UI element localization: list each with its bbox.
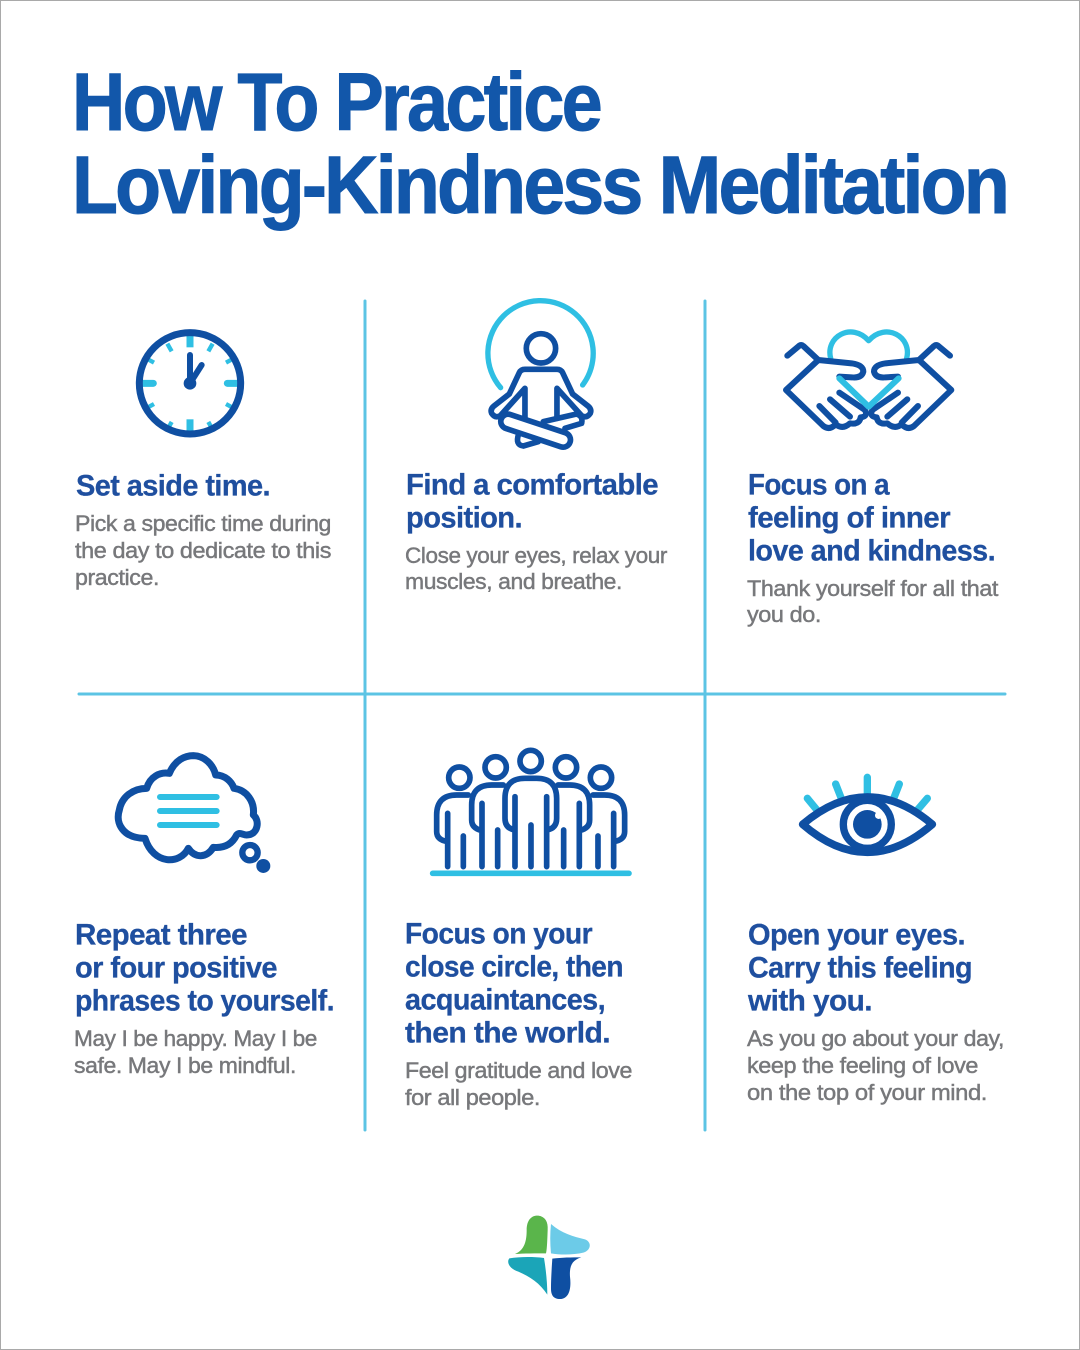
heading: open your eyes — [747, 918, 972, 1018]
text: repeat positive phrases: safe. May I be mindful. — [74, 1053, 296, 1078]
text: inner love and kindness: you do. — [747, 602, 821, 627]
heading: close circle and world: acquaintances, — [405, 984, 605, 1016]
heading: open your eyes: with you. — [747, 984, 872, 1018]
text: set aside time: Pick a specific time during — [75, 511, 331, 536]
icon: thought cloud — [118, 756, 270, 873]
text: close circle and world: for all people. — [405, 1085, 540, 1110]
panel: repeat positive phrases — [74, 756, 334, 1078]
heading: open your eyes: Carry this feeling — [748, 952, 972, 984]
text: find a comfortable position: muscles, and breathe. — [405, 569, 622, 594]
text: repeat positive phrases — [74, 1026, 317, 1078]
icon: hands holding heart — [786, 332, 951, 428]
title: How To Practice — [72, 57, 600, 148]
title — [72, 57, 1007, 231]
heading: open your eyes: Open your eyes. — [748, 918, 965, 952]
heading: inner love and kindness — [748, 468, 995, 568]
heading: repeat positive phrases — [75, 918, 334, 1018]
heading: inner love and kindness: love and kindness. — [748, 534, 995, 568]
icon: meditating person — [488, 301, 593, 449]
icon: group of people — [433, 750, 629, 873]
heading: find a comfortable position — [406, 468, 658, 534]
text: open your eyes — [747, 1026, 1004, 1105]
heading: find a comfortable position: position. — [406, 502, 522, 534]
text: close circle and world — [405, 1058, 632, 1110]
panel: close circle and world — [405, 750, 632, 1110]
heading: set aside time: Set aside time. — [76, 470, 270, 502]
icon: clock — [139, 333, 241, 434]
panel: inner love and kindness — [747, 332, 999, 627]
heading: inner love and kindness: feeling of inner — [748, 502, 951, 534]
title: Loving-Kindness Meditation — [72, 140, 1007, 231]
heading: close circle and world: close circle, then — [405, 950, 623, 984]
heading: close circle and world: Focus on your — [405, 918, 593, 950]
heading: find a comfortable position: Find a comfortable — [406, 468, 658, 502]
text: set aside time: the day to dedicate to this — [75, 538, 331, 563]
heading: close circle and world — [405, 918, 623, 1050]
text: open your eyes: As you go about your day, — [747, 1026, 1004, 1051]
text: find a comfortable position — [405, 543, 668, 594]
text: open your eyes: keep the feeling of love — [747, 1053, 978, 1078]
text: repeat positive phrases: May I be happy. May I be — [74, 1026, 317, 1051]
text: inner love and kindness — [747, 576, 999, 627]
text: close circle and world: Feel gratitude and love — [405, 1058, 632, 1083]
heading: repeat positive phrases: Repeat three — [75, 918, 247, 952]
icon: eye — [803, 777, 932, 852]
heading: close circle and world: then the world. — [405, 1016, 610, 1050]
panel: open your eyes — [747, 777, 1004, 1105]
heading: repeat positive phrases: or four positive — [75, 952, 277, 984]
heading: repeat positive phrases: phrases to yourself. — [75, 984, 334, 1018]
text: set aside time — [75, 511, 331, 590]
panel: find a comfortable position — [405, 301, 668, 594]
logo: four-petal cross — [508, 1216, 590, 1299]
text: open your eyes: on the top of your mind. — [747, 1080, 987, 1105]
text: set aside time: practice. — [75, 565, 159, 590]
text: inner love and kindness: Thank yourself for all that — [747, 576, 999, 601]
panel: set aside time — [75, 333, 331, 590]
text: find a comfortable position: Close your eyes, relax your — [405, 543, 668, 568]
heading: inner love and kindness: Focus on a — [748, 468, 890, 502]
